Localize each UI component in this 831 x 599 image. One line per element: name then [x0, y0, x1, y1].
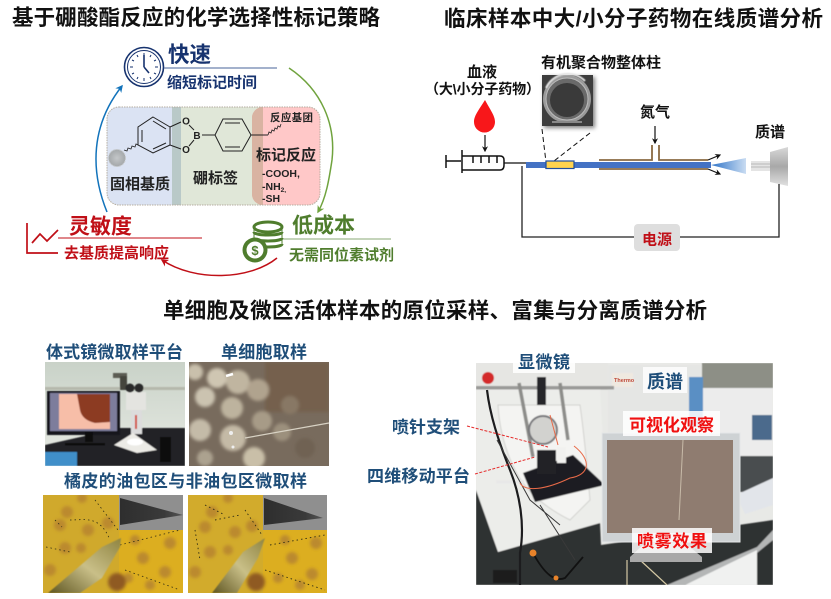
- monitor: [602, 433, 740, 562]
- circuit wire: [522, 166, 779, 237]
- column: yellow segment: [546, 161, 574, 168]
- icon: solid substrate bead: [108, 150, 126, 166]
- label: reactive group: 反应基团: [270, 111, 313, 124]
- panel: online MS schematic: [425, 54, 788, 251]
- label: monolithic column: 有机聚合物整体柱: [541, 54, 661, 72]
- arrow: sensitivity to fast: [96, 86, 122, 212]
- arrow: blood into syringe: [484, 135, 486, 151]
- label: labeling reaction: 标记反应: [256, 146, 316, 164]
- label: nitrogen: 氮气: [640, 103, 670, 121]
- photo: non oil gland sampling: [188, 493, 327, 593]
- arrow: gas out lower: [708, 169, 720, 174]
- photo: microscope platform: [45, 362, 185, 466]
- label: mass spectrometer: 质谱: [755, 123, 785, 141]
- panel: microsampling photos: [43, 342, 329, 593]
- callout lines: holder and stage: [467, 426, 548, 474]
- label: spray effect: 喷雾效果: [637, 532, 707, 551]
- label: mass spec: [643, 367, 687, 393]
- label: functional groups: -SH: [262, 193, 280, 205]
- divider: low cost: [283, 238, 391, 240]
- atom labels: B: [193, 131, 201, 142]
- callout lines: column zoom: [542, 129, 590, 168]
- label: Thermo logo: Thermo: [614, 378, 635, 384]
- label: functional groups: -NH: [262, 181, 281, 193]
- divider: fast: [164, 67, 277, 69]
- title: single cell sampling: 单细胞及微区活体样本的原位采样、富集与分离质谱分析: [163, 298, 707, 323]
- label: functional groups: 2,: [281, 187, 286, 194]
- photo: mass spectrometer setup: [476, 363, 773, 585]
- icon: sensitivity chart: [27, 223, 58, 253]
- image: column micrograph: [542, 74, 593, 126]
- label: functional groups: -COOH,: [262, 168, 300, 180]
- icon: blood drop: [474, 100, 495, 132]
- label: power supply: [634, 224, 680, 251]
- arrow: low cost to sensitivity: [162, 258, 277, 276]
- label: mass spec: 质谱: [647, 371, 683, 392]
- atom labels: [182, 116, 201, 156]
- label: blood: 血液: [467, 63, 497, 81]
- label: solid substrate: 固相基质: [110, 175, 170, 193]
- molecule: boronate ester: [124, 117, 281, 153]
- text: no isotopes needed: 无需同位素试剂: [289, 246, 394, 264]
- label: 4D moving stage: 四维移动平台: [367, 466, 470, 486]
- photo: oil gland sampling: [43, 493, 183, 593]
- icon: MS inlet: [751, 147, 788, 186]
- label: visual observation: [623, 411, 720, 436]
- icon: syringe: [446, 150, 526, 173]
- panel: molecule background: [107, 107, 320, 205]
- label: spray effect: [632, 528, 712, 553]
- label: boron tag: 硼标签: [193, 169, 238, 187]
- text: improve response: 去基质提高响应: [64, 244, 169, 262]
- spray plume: [711, 158, 746, 174]
- capillary: blue tube: [526, 162, 711, 168]
- heading: fast: 快速: [168, 43, 211, 67]
- label: large and small molecule drugs: （大\小分子药物）: [425, 81, 540, 97]
- label: emitter holder: 喷针支架: [392, 417, 460, 437]
- arrow: nitrogen in: [654, 126, 656, 143]
- label: power supply: 电源: [642, 232, 672, 248]
- label: stereomicroscope platform: 体式镜微取样平台: [46, 342, 183, 362]
- icon: clock: [124, 48, 164, 86]
- arrow: fast to low cost: [289, 68, 333, 212]
- label: microscope: 显微镜: [518, 352, 570, 372]
- label: functional groups: [262, 168, 300, 205]
- atom labels: O: [182, 116, 190, 128]
- text: shorter labeling time: 缩短标记时间: [167, 74, 257, 92]
- icon: coins: $: [251, 243, 259, 258]
- title: boronate strategy: 基于硼酸酯反应的化学选择性标记策略: [12, 5, 380, 30]
- panel: instrument photo: [367, 352, 773, 585]
- icon: coins: [242, 222, 282, 262]
- heading: sensitivity: 灵敏度: [69, 216, 132, 238]
- photo: single cell sampling: [187, 362, 329, 469]
- panel: boronate labeling cycle: [27, 43, 394, 276]
- arrow: gas out upper: [708, 155, 720, 160]
- title: online mass spectrometry: 临床样本中大/小分子药物在线质谱分析: [444, 6, 823, 31]
- label: orange peel sampling: 橘皮的油包区与非油包区微取样: [64, 471, 307, 491]
- sheath tube: nitrogen: [599, 145, 708, 169]
- heading: low cost: 低成本: [292, 214, 355, 238]
- divider: sensitivity: [58, 237, 202, 239]
- label: single cell sampling: 单细胞取样: [221, 342, 307, 362]
- atom labels: O: [182, 145, 190, 156]
- label: visual observation: 可视化观察: [629, 415, 714, 435]
